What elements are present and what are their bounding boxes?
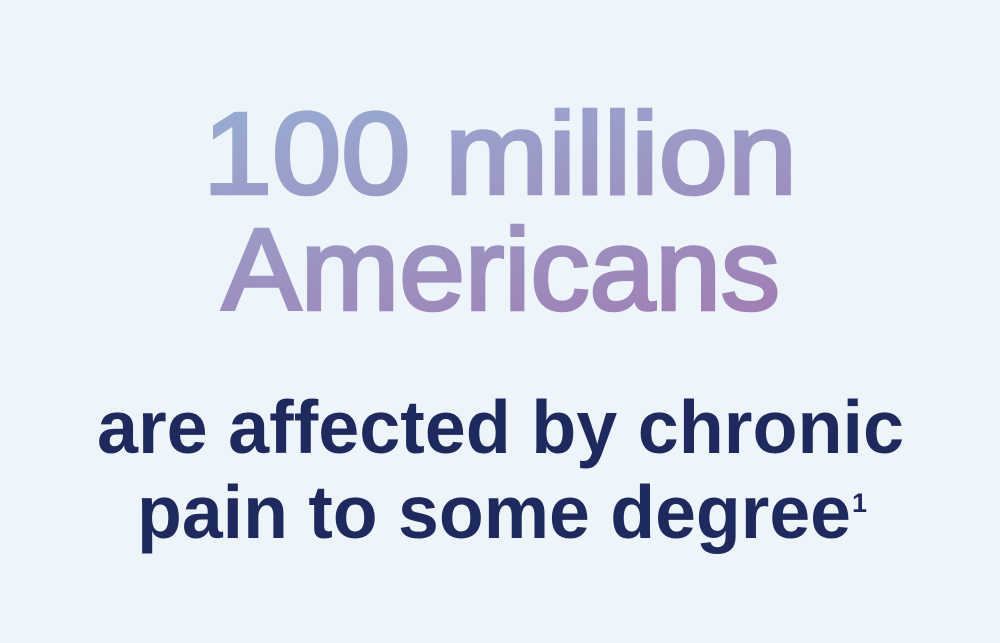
subheading: are affected by chronic pain to some degree: are affected by chronic — [97, 385, 904, 469]
footnote marker: 1 — [852, 488, 867, 518]
headline: 100 million Americans — [203, 88, 797, 334]
subheading: are affected by chronic pain to some degree: pain to some degree — [137, 470, 851, 554]
headline: 100 million Americans: 100 million — [203, 88, 797, 218]
headline: 100 million Americans: Americans — [222, 204, 780, 334]
subheading: are affected by chronic pain to some degree — [97, 385, 904, 554]
